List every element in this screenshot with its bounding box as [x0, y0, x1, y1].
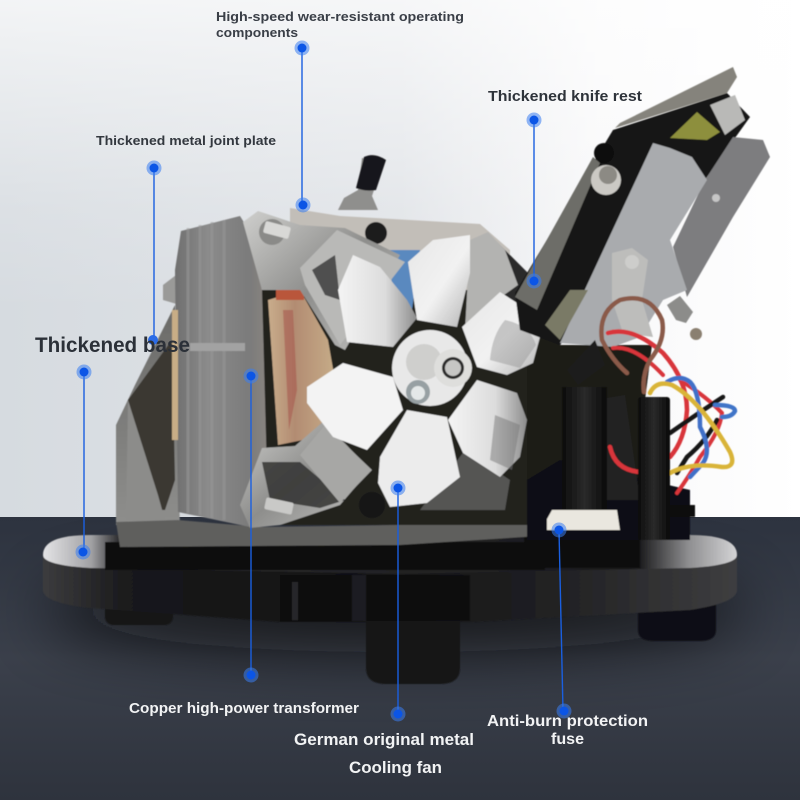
upper frame	[243, 211, 518, 350]
label: high-speed wear-resistant operating components	[216, 9, 464, 40]
label: copper high-power transformer: Copper high-power transformer	[129, 701, 359, 717]
shaft knob	[338, 155, 387, 244]
leader line: cooling fan	[390, 480, 406, 722]
cooling fan	[307, 235, 540, 507]
copper winding	[268, 290, 335, 445]
label: anti-burn protection fuse	[487, 713, 648, 748]
label: thickened base: Thickened base	[35, 334, 190, 357]
black tube and white nut	[547, 397, 670, 540]
label: german original metal cooling fan: Cooling fan	[349, 758, 442, 777]
metal bracket joint plate	[116, 208, 540, 547]
label: german original metal cooling fan: German original metal	[294, 730, 474, 749]
product photo illustration	[43, 67, 770, 684]
label: anti-burn protection fuse: Anti-burn protection	[487, 713, 648, 730]
coloured wires	[601, 298, 735, 493]
lower frame	[240, 420, 510, 528]
dark floor	[0, 517, 800, 800]
label: high-speed wear-resistant operating components: components	[216, 25, 298, 40]
leader line: fuse	[552, 522, 572, 718]
leader line: joint plate	[146, 160, 162, 345]
label: high-speed wear-resistant operating components: High-speed wear-resistant operating	[216, 9, 464, 24]
leader line: transformer	[244, 368, 258, 682]
label: thickened metal joint plate: Thickened metal joint plate	[96, 133, 276, 148]
background wall	[0, 0, 800, 518]
label: german original metal cooling fan	[294, 730, 474, 777]
leader line: high-speed components	[294, 40, 310, 212]
fuse holder block and tubes	[527, 340, 695, 540]
dark cavity behind fan	[260, 240, 652, 525]
leader line: knife rest	[526, 112, 542, 288]
round black base	[43, 527, 737, 684]
laminated iron core	[172, 216, 268, 527]
leader line: base	[76, 364, 92, 560]
label: anti-burn protection fuse: fuse	[551, 731, 584, 748]
label: thickened knife rest: Thickened knife rest	[488, 88, 642, 105]
knife rest assembly	[515, 67, 770, 347]
